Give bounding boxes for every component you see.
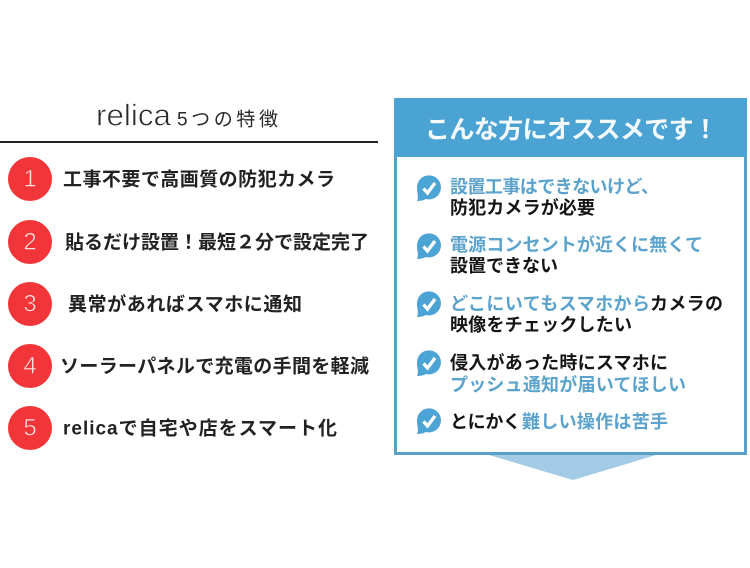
heading: relica 5 features bbox=[0, 98, 378, 143]
item 2: 電源コンセントが近くに無くて bbox=[450, 234, 703, 255]
panel: recommended for bbox=[394, 98, 747, 454]
feature 4: 4 bbox=[23, 352, 37, 380]
arrow: down bbox=[489, 455, 656, 480]
item 1 bbox=[417, 175, 659, 218]
feature 5: relicaで自宅や店をスマート化 bbox=[63, 418, 337, 440]
feature 5: 5 bbox=[23, 414, 37, 442]
feature 5 bbox=[8, 406, 337, 450]
item 2: 設置できない bbox=[450, 256, 558, 276]
panel frame bbox=[396, 100, 746, 454]
feature 1: 工事不要で高画質の防犯カメラ bbox=[63, 168, 335, 190]
item 2 bbox=[417, 233, 703, 276]
item 4: 侵入があった時にスマホに bbox=[450, 352, 668, 373]
feature 3: 3 bbox=[23, 290, 37, 318]
item 3: カメラの bbox=[650, 294, 723, 314]
feature 3 bbox=[8, 282, 302, 326]
heading: relica 5 features: relica bbox=[96, 98, 172, 132]
item 3: 映像をチェックしたい bbox=[450, 315, 632, 335]
feature 4 bbox=[8, 344, 369, 388]
header band bbox=[394, 98, 747, 157]
item 5 bbox=[417, 408, 668, 434]
item 5: とにかく bbox=[450, 412, 521, 432]
feature 4: ソーラーパネルで充電の手間を軽減 bbox=[60, 354, 369, 378]
item 1: 防犯カメラが必要 bbox=[450, 197, 595, 218]
panel: relica features bbox=[0, 98, 378, 450]
feature 2: 2 bbox=[23, 228, 37, 256]
item 1: 設置工事はできないけど、 bbox=[450, 177, 659, 197]
item 3 bbox=[417, 291, 723, 335]
feature 2 bbox=[8, 220, 369, 264]
item 5: 難しい操作は苦手 bbox=[522, 412, 668, 432]
feature 2: 貼るだけ設置！最短２分で設定完了 bbox=[65, 232, 369, 254]
item 4: プッシュ通知が届いてほしい bbox=[450, 374, 686, 395]
feature 1 bbox=[8, 157, 335, 201]
heading: relica 5 features: 5つの特徴 bbox=[177, 108, 278, 130]
feature 3: 異常があればスマホに通知 bbox=[68, 292, 302, 316]
item 4 bbox=[417, 350, 686, 395]
header title: こんな方にオススメです！ bbox=[425, 116, 718, 144]
item 3: どこにいてもスマホから bbox=[450, 294, 650, 314]
feature 1: 1 bbox=[23, 166, 37, 192]
